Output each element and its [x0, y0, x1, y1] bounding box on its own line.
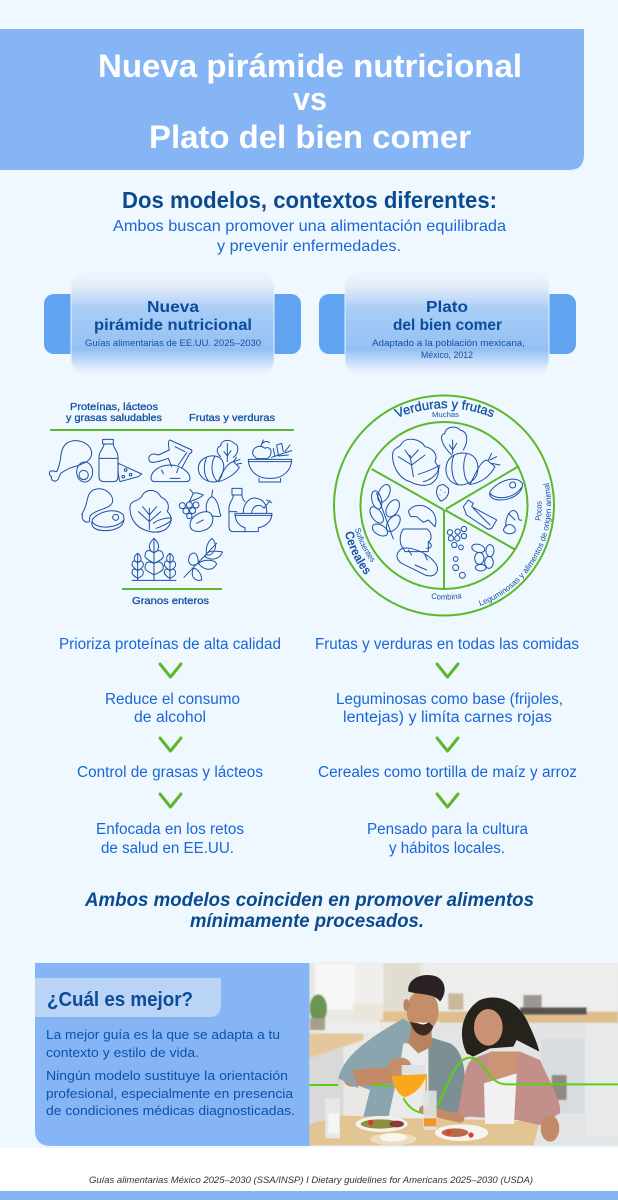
plate labels: Cereales: [346, 532, 370, 574]
panel heading: [35, 978, 221, 1017]
left comparison column: Reduce el consumo: [105, 691, 240, 708]
arrow: [160, 664, 181, 677]
sources footer: Guías alimentarias México 2025–2030 (SSA/INSP) I Dietary guidelines for Americans 2025–2030 (USDA): [89, 1175, 533, 1186]
title banner: Plato del bien comer: [149, 119, 471, 155]
arrow: [437, 738, 458, 751]
panel body text: La mejor guía es la que se adapta a tu: [46, 1027, 280, 1042]
right comparison column: Leguminosas como base (frijoles,: [336, 691, 563, 708]
right comparison column: Frutas y verduras en todas las comidas: [315, 636, 579, 653]
left comparison column: de salud en EE.UU.: [101, 840, 234, 857]
card: plato del bien comer: [319, 273, 576, 375]
left comparison column: Control de grasas y lácteos: [77, 764, 263, 781]
right comparison column: Cereales como tortilla de maíz y arroz: [318, 764, 577, 781]
card: plato del bien comer: Adaptado a la población mexicana,: [372, 338, 525, 349]
pyramid labels: [50, 402, 294, 607]
title banner: [0, 29, 584, 170]
card: nueva pirámide: Nueva: [147, 299, 199, 316]
pyramid labels: Granos enteros: [132, 596, 209, 607]
plate labels: [346, 400, 552, 606]
heading: two models: [113, 187, 506, 255]
photo: couple at kitchen table: [309, 963, 618, 1146]
pyramid food icons: [49, 439, 292, 580]
heading: two models: y prevenir enfermedades.: [217, 238, 401, 255]
green wave line: [309, 1058, 618, 1113]
plate labels: Verduras y frutas: [394, 400, 494, 417]
plate circles: [334, 396, 554, 616]
arrow: [160, 794, 181, 807]
footer background: [0, 1148, 618, 1191]
pyramid labels: Proteínas, lácteos: [70, 402, 158, 413]
plate labels: Combina: [432, 593, 462, 600]
pyramid labels: y grasas saludables: [66, 413, 162, 424]
heading: two models: Ambos buscan promover una alimentación equilibrada: [113, 218, 506, 235]
left comparison column: Enfocada en los retos: [96, 821, 244, 838]
title banner: vs: [293, 81, 327, 117]
arrow: [160, 738, 181, 751]
heading: two models: Dos modelos, contextos diferentes:: [122, 187, 497, 213]
right comparison column: y hábitos locales.: [389, 840, 505, 857]
card: plato del bien comer: del bien comer: [393, 317, 502, 334]
card: plato del bien comer: México, 2012: [421, 350, 473, 361]
left comparison column: Prioriza proteínas de alta calidad: [59, 636, 281, 653]
pyramid labels: Frutas y verduras: [189, 413, 275, 424]
left comparison column: [59, 636, 281, 857]
card: plato del bien comer: Plato: [426, 299, 468, 316]
panel body text: Ningún modelo sustituye la orientación: [46, 1068, 288, 1083]
arrow: [437, 794, 458, 807]
card: nueva pirámide: [44, 273, 301, 375]
plate diagram: [333, 394, 555, 616]
footer band: [0, 1191, 618, 1200]
panel body text: profesional, especialmente en presencia: [46, 1086, 294, 1101]
conclusion statement: mínimamente procesados.: [190, 911, 424, 932]
panel body text: contexto y estilo de vida.: [46, 1045, 199, 1060]
panel: cuál es mejor: [35, 963, 310, 1146]
pyramid diagram: [49, 402, 294, 607]
plate labels: Leguminosas y alimentos de origen animal: [478, 483, 552, 606]
plate food icons: [367, 427, 522, 578]
panel heading: ¿Cuál es mejor?: [47, 989, 193, 1011]
panel body text: [46, 1027, 295, 1118]
plate labels: Suficientes: [355, 528, 374, 562]
plate labels: Muchas: [432, 410, 459, 419]
plate labels: Pocos: [535, 501, 542, 520]
right comparison column: [315, 636, 579, 857]
panel body text: de condiciones médicas diagnosticadas.: [46, 1103, 295, 1118]
card: nueva pirámide: pirámide nutricional: [94, 317, 252, 334]
conclusion statement: Ambos modelos coinciden en promover alimentos: [84, 890, 534, 911]
card: nueva pirámide: Guías alimentarias de EE.UU. 2025–2030: [85, 338, 261, 349]
title banner: Nueva pirámide nutricional: [98, 48, 522, 84]
left comparison column: de alcohol: [134, 709, 206, 726]
arrow: [437, 664, 458, 677]
right comparison column: Pensado para la cultura: [367, 821, 528, 838]
right comparison column: lentejas) y limíta carnes rojas: [343, 709, 552, 726]
conclusion statement: [84, 890, 534, 932]
